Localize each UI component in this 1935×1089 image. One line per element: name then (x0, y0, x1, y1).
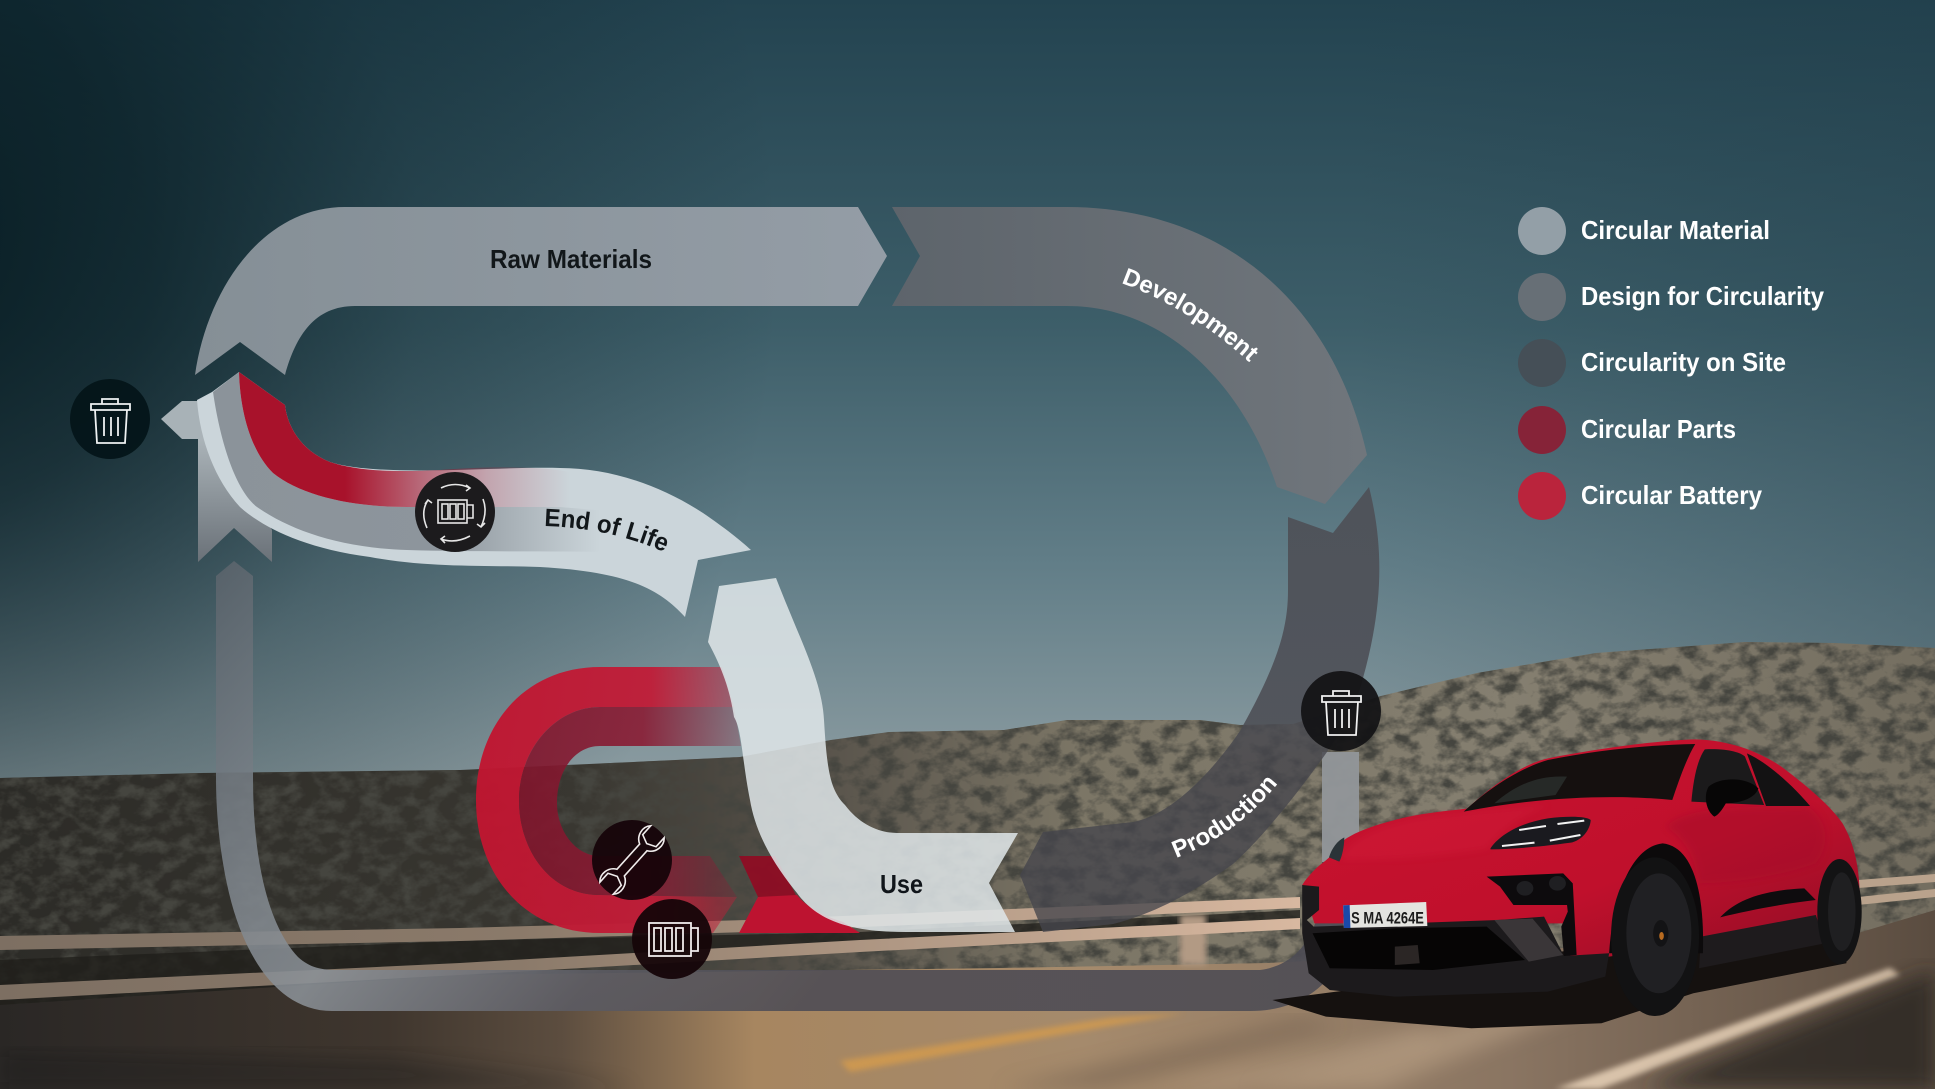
legend item: Design for Circularity: Design for Circularity (1581, 281, 1824, 311)
headlight (1490, 817, 1591, 849)
legend item: Circular Battery (1518, 472, 1762, 520)
arrow: return path along the bottom (216, 561, 1359, 1011)
car body (1302, 739, 1860, 958)
number plate: S MA 4264E (1351, 908, 1424, 927)
windshield (1464, 744, 1695, 812)
icon: battery recycling (415, 472, 495, 552)
legend item: Circularity on Site: Circularity on Site (1581, 347, 1786, 377)
arrow: use (708, 578, 1018, 932)
label: Raw Materials: Raw Materials (490, 244, 652, 274)
legend (1518, 207, 1824, 520)
arrow: development (892, 207, 1367, 504)
car shadow (1272, 933, 1846, 1028)
arrow: small grey arrow up to recycling junction (198, 400, 272, 562)
legend item: Circular Parts (1518, 406, 1736, 454)
marker light (1329, 837, 1344, 862)
label: End of Life: End of Life (546, 508, 668, 550)
arrow: red segment into use (739, 856, 860, 933)
arrow: end of life (197, 372, 751, 617)
lower light intake (1487, 873, 1577, 956)
label: Use: Use (880, 869, 923, 899)
side windows (1691, 749, 1764, 805)
band: red battery (239, 372, 570, 507)
arrow: circular battery loop (476, 667, 737, 933)
legend item: Circular Material: Circular Material (1581, 215, 1770, 245)
label: Production: Production (1171, 778, 1277, 858)
bumper (1302, 885, 1609, 997)
icon: battery (632, 899, 712, 979)
label: Development: Development (1122, 268, 1258, 362)
legend item: Design for Circularity (1518, 273, 1824, 321)
icon: waste bin right (1301, 671, 1381, 751)
arrow: circular parts loop (519, 707, 741, 897)
legend item: Circular Battery: Circular Battery (1581, 480, 1762, 510)
icon: wrench (592, 820, 672, 900)
arrow: raw materials (195, 207, 887, 375)
number plate (1343, 902, 1427, 928)
car (1272, 739, 1862, 1028)
front wheel arch and wheel (1609, 843, 1703, 1016)
icon: waste bin left (70, 379, 150, 459)
legend item: Circularity on Site (1518, 339, 1786, 387)
legend item: Circular Material (1518, 207, 1770, 255)
mirror (1706, 779, 1758, 817)
band: grey material (213, 372, 620, 552)
rear wheel (1817, 859, 1862, 964)
side sill (1699, 915, 1825, 968)
legend item: Circular Parts: Circular Parts (1581, 414, 1736, 444)
arrow: small arrow to waste (161, 401, 200, 439)
arrow: production (1020, 487, 1380, 932)
